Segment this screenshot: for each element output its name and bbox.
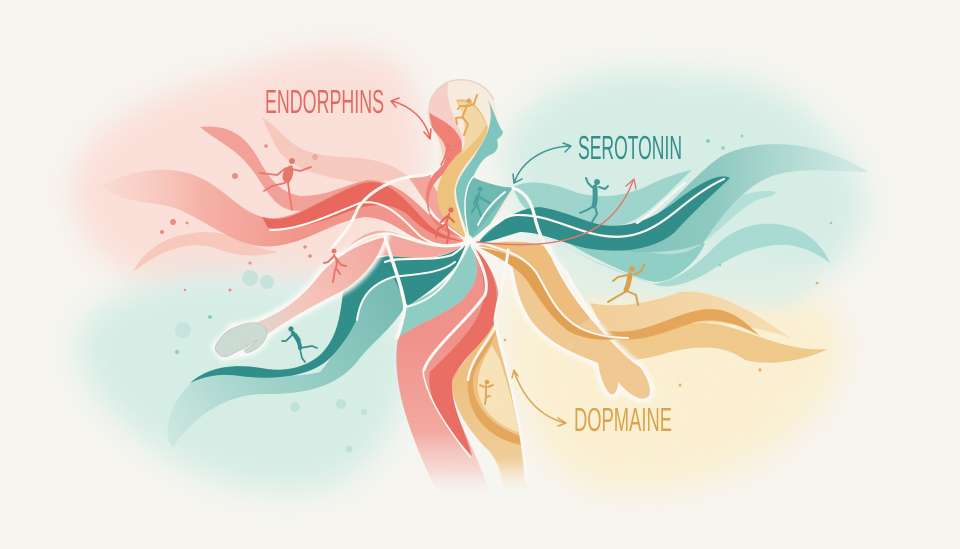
runner: red small neck	[441, 144, 452, 165]
lower pale ribbon	[133, 232, 278, 272]
white body lines	[270, 165, 724, 480]
wing dark stripe	[605, 309, 760, 340]
head rim	[429, 80, 494, 125]
lower wing	[610, 323, 828, 363]
arm shading	[478, 242, 590, 326]
teal left ribbon	[168, 241, 477, 447]
arrow: serotonin	[513, 143, 571, 183]
runner: orange low	[480, 380, 493, 404]
red band body	[396, 244, 499, 494]
red ribbons group	[102, 118, 468, 272]
runner: red top left	[260, 158, 311, 210]
runner: orange right	[608, 265, 644, 305]
yellow head stripe	[437, 99, 488, 240]
runner: teal left	[282, 326, 317, 362]
far lower ribbon	[545, 224, 830, 286]
main red ribbon	[102, 170, 468, 246]
red head stripe	[426, 112, 468, 240]
red right-centre band through neck	[408, 158, 468, 240]
arm halo	[510, 247, 650, 399]
wash: teal upper right	[504, 70, 866, 305]
teal face	[456, 100, 513, 240]
wash: yellow lower right	[505, 276, 844, 492]
runner: teal right	[580, 178, 608, 222]
dark teal stripe	[478, 176, 730, 251]
main teal ribbon	[478, 144, 868, 252]
right arm (orange)	[478, 242, 650, 399]
center burst	[463, 235, 473, 245]
mid pale ribbon	[640, 191, 776, 254]
light tail	[168, 277, 405, 447]
head and torso	[426, 80, 513, 240]
runner: red centre	[436, 207, 454, 243]
label: endorphins: ENDORPHINS	[265, 83, 384, 120]
light upper ribbon	[262, 118, 408, 183]
arm halo	[215, 237, 385, 357]
forearm	[255, 237, 385, 334]
arm dark stripe	[480, 248, 625, 340]
upper wing	[590, 291, 790, 345]
runner: red arm	[324, 248, 346, 282]
wash: red upper left	[72, 49, 426, 290]
paint splatter dots	[160, 134, 832, 452]
orange band body	[452, 320, 526, 492]
wash: teal lower left	[77, 274, 411, 492]
runner: teal torso	[472, 186, 490, 216]
left arm	[215, 237, 385, 357]
wash: lower right transition	[560, 244, 820, 310]
arrow: endorphins	[391, 98, 431, 139]
dark ribbon left	[190, 241, 468, 383]
down orange band	[452, 320, 526, 492]
down red band	[396, 244, 499, 494]
arrow: dopamine	[512, 370, 566, 426]
head pink left	[429, 82, 462, 170]
right teal ribbons	[478, 144, 868, 286]
head outline fill	[429, 80, 513, 240]
yellow light fill	[458, 102, 486, 155]
red inner stripe	[429, 246, 497, 456]
right orange wings	[590, 291, 828, 363]
runner: head yellow	[456, 95, 477, 135]
arm body	[510, 247, 650, 399]
far lower ribbon fill	[560, 238, 705, 282]
teal inner wedge	[398, 244, 477, 338]
label: dopamine: DOPMAINE	[574, 401, 672, 438]
orange pale interior	[478, 345, 518, 432]
teal torso dark	[464, 178, 513, 240]
top-left ribbon	[200, 127, 368, 211]
arrow: red rising	[477, 179, 636, 245]
upper pale ribbon	[513, 170, 692, 226]
label: serotonin: SEROTONIN	[578, 129, 682, 166]
hand	[215, 323, 267, 357]
red dark stripe	[262, 182, 462, 241]
orange dark stripe	[468, 330, 522, 445]
red lower band	[345, 231, 462, 262]
